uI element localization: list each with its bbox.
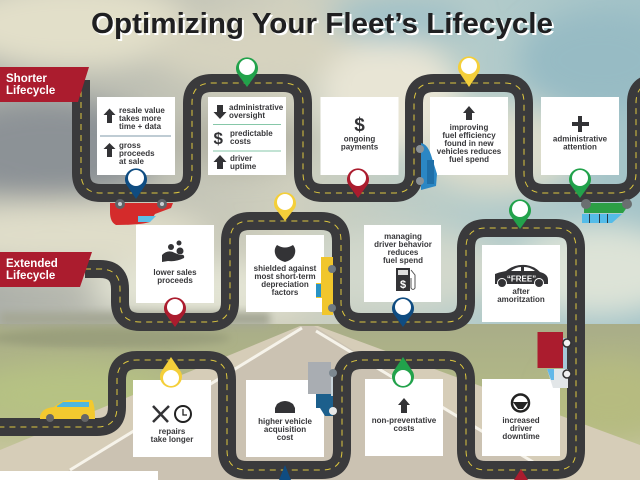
card: managing driver behavior: fuel spend — [383, 256, 423, 265]
vehicle: yellow car — [40, 400, 95, 422]
vehicle: red car — [110, 199, 173, 225]
card: improving fuel efficiency: vehicles reduces — [437, 147, 502, 156]
card: improving fuel efficiency: improving — [450, 123, 488, 132]
card: bottom-left partial panel — [0, 471, 158, 480]
card: improving fuel efficiency: found in new — [444, 139, 494, 148]
card: improving fuel efficiency: fuel efficiency — [442, 131, 496, 140]
card: managing driver behavior — [364, 225, 441, 302]
title: Optimizing Your Fleet’s Lifecycle — [93, 10, 555, 42]
road: shorter lifecycle — [81, 80, 640, 193]
pin: green, right — [569, 168, 591, 198]
banner: shorter lifecycle — [0, 67, 89, 102]
icon: up arrow — [104, 108, 116, 123]
card: non-preventative costs: costs — [394, 424, 415, 433]
card: increased driver downtime: downtime — [502, 432, 540, 441]
vehicle: blue and grey truck — [308, 362, 337, 416]
banner: shorter lifecycle: Shorter — [6, 73, 47, 85]
card: non-preventative costs: non-preventative — [372, 416, 437, 425]
title: Optimizing Your Fleet’s Lifecycle — [91, 8, 553, 40]
card: managing driver behavior: driver behavior — [374, 240, 432, 249]
card: free after amortization: amoritzation — [497, 295, 545, 304]
banner: extended lifecycle: Lifecycle — [6, 270, 55, 282]
card: higher vehicle acquisition cost: acquisition — [264, 425, 306, 434]
card: repairs take longer — [133, 380, 211, 457]
card: resale value and gross proceeds: gross — [119, 141, 141, 150]
banner: extended lifecycle — [0, 252, 92, 287]
card: administrative oversight, predictable costs, driver uptime: driver — [230, 154, 252, 163]
pin: blue, extended — [392, 297, 414, 327]
card: administrative oversight, predictable costs, driver uptime: oversight — [229, 111, 265, 120]
pin: yellow, centre — [274, 192, 296, 221]
pin: red, shorter lifecycle — [347, 168, 369, 198]
icon: fuel pump: $ — [400, 279, 406, 291]
card: managing driver behavior: reduces — [388, 248, 419, 257]
card: improving fuel efficiency: fuel spend — [449, 155, 489, 164]
card: administrative attention: administrative — [553, 134, 608, 144]
card: higher vehicle acquisition cost: cost — [277, 433, 294, 442]
card: resale value and gross proceeds: time + data — [119, 122, 162, 131]
card: administrative oversight, predictable costs, driver uptime — [208, 97, 286, 175]
vehicle: green van — [581, 199, 632, 223]
pin: yellow, top right — [458, 56, 480, 87]
card: lower sales proceeds: lower sales — [153, 268, 197, 277]
card: lower sales proceeds: proceeds — [157, 276, 193, 285]
pin: green, inverted — [392, 357, 414, 388]
card: resale value and gross proceeds: at sale — [119, 157, 144, 166]
card: free after amortization: after — [512, 287, 530, 296]
card: ongoing payments — [320, 97, 398, 175]
card: shielded against depreciation: most short-term — [254, 272, 316, 281]
card: administrative attention — [541, 97, 619, 175]
road: extended lifecycle — [0, 221, 576, 470]
card: non-preventative costs — [365, 379, 443, 456]
card: shielded against depreciation: shielded against — [254, 264, 317, 273]
card: higher vehicle acquisition cost — [246, 380, 324, 457]
card: shielded against depreciation: factors — [272, 288, 299, 297]
card: administrative attention: attention — [563, 142, 597, 152]
vehicle: yellow truck — [316, 257, 336, 315]
banner: extended lifecycle: Extended — [6, 258, 58, 270]
card: resale value and gross proceeds: resale value — [119, 106, 165, 115]
card: resale value and gross proceeds: proceeds — [119, 149, 155, 158]
card: administrative oversight, predictable costs, driver uptime: administrative — [229, 103, 284, 112]
card: shielded against depreciation: depreciation — [261, 280, 309, 289]
card: improving fuel efficiency — [430, 97, 508, 175]
card: free after amortization — [482, 245, 560, 322]
pin: red, bottom edge — [514, 469, 528, 480]
card: ongoing payments: $ — [354, 115, 365, 136]
card: shielded against depreciation — [246, 235, 324, 312]
pin: yellow, inverted — [160, 357, 182, 388]
banner: shorter lifecycle: Lifecycle — [6, 85, 55, 97]
card: increased driver downtime: driver — [510, 424, 532, 433]
card: free after amortization: “FREE” — [507, 274, 536, 284]
pin: green, extended — [509, 199, 531, 229]
card: administrative oversight, predictable costs, driver uptime: costs — [230, 137, 251, 146]
pin: blue, shorter lifecycle — [125, 168, 147, 199]
card: repairs take longer: repairs — [159, 427, 186, 436]
card: resale value and gross proceeds: takes more — [119, 114, 162, 123]
card: increased driver downtime: increased — [502, 416, 540, 425]
pin: green, top — [236, 57, 258, 87]
card: resale value and gross proceeds — [97, 97, 175, 175]
card: higher vehicle acquisition cost: higher vehicle — [258, 417, 312, 426]
card: ongoing payments: payments — [341, 142, 379, 152]
card: administrative oversight, predictable costs, driver uptime: $ — [214, 129, 224, 148]
card: increased driver downtime — [482, 379, 560, 456]
card: managing driver behavior: managing — [384, 232, 422, 241]
card: administrative oversight, predictable costs, driver uptime: predictable — [230, 129, 273, 138]
pin: blue, bottom edge — [279, 465, 291, 480]
card: administrative oversight, predictable costs, driver uptime: uptime — [230, 162, 257, 171]
card: ongoing payments: ongoing — [344, 134, 375, 144]
card: repairs take longer: take longer — [151, 435, 193, 444]
card: lower sales proceeds — [136, 225, 214, 303]
vehicle: red truck — [538, 332, 571, 388]
pin: red, extended — [164, 297, 186, 327]
vehicle: blue van — [416, 143, 437, 190]
